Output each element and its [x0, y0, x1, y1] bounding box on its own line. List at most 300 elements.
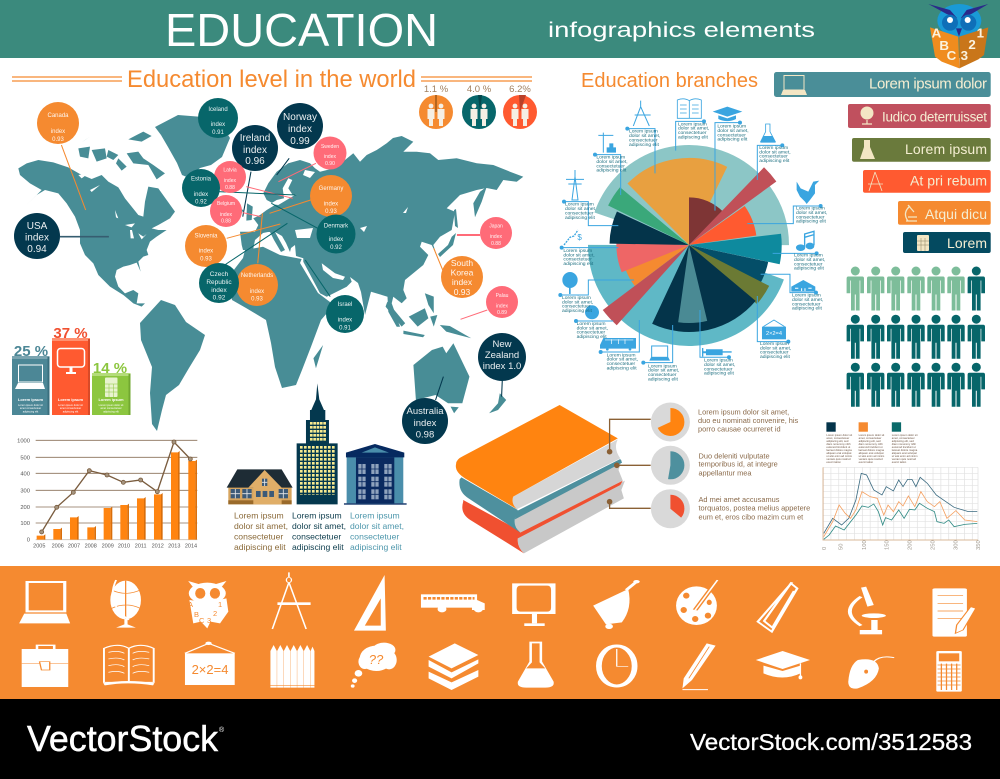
callout: rooster: Lorem ipsum [796, 206, 825, 212]
legend: teal series: exerci tation [892, 460, 907, 464]
bubble: Norway: Norway [283, 112, 317, 123]
Eurasia [240, 136, 523, 327]
line chart axis labels [822, 540, 982, 550]
islands [238, 203, 506, 413]
icon: stack of books [456, 405, 625, 553]
subtitle: infographics elements [548, 18, 815, 42]
icon: blackboard: 2×2=4 [192, 662, 228, 677]
legend: orange series: amet, consectetuer [859, 436, 882, 440]
callout: ball: dolor sit amet, [577, 325, 608, 331]
Greenland [155, 115, 230, 178]
gender percentage circles [419, 84, 537, 129]
callout: laptop: Lorem ipsum [648, 363, 677, 369]
bubble: Japan: Japan [489, 224, 503, 230]
callout 2 connector and pie [614, 446, 778, 485]
callout: ball: adipiscing elit [577, 334, 607, 340]
bubble: Japan: 0.88 [491, 241, 501, 247]
bubble: Estonia: 0.92 [195, 200, 207, 206]
people row: all dark [847, 315, 985, 359]
column 37 % monitor [52, 325, 90, 415]
chart y axis labels: 400 [20, 471, 30, 477]
callout: finance chart: consectetuer [563, 257, 592, 263]
callout 1 text: duo eu nominati convenire, his [698, 416, 799, 425]
bar: Lorem ipsum: Lorem ipsum [905, 141, 987, 157]
callout: building: Lorem ipsum [792, 293, 821, 299]
caption: skyscraper: adipiscing elit [292, 542, 344, 552]
callout: ball [574, 305, 613, 340]
bar: Lorem ipsum dolor [774, 72, 991, 97]
bubble: Latvia: index [224, 178, 236, 184]
legend: teal series: adipiscing elit, sed [892, 439, 914, 443]
column 14 % calculator: amet consectetuer [100, 406, 122, 410]
column 37 % monitor: 37 % [53, 325, 88, 342]
bubble: Israel: index [338, 318, 352, 324]
country index bubbles [14, 98, 526, 444]
caption: bank: dolor sit amet, [350, 521, 404, 531]
icon: set square [354, 575, 386, 631]
callout: graduation cap: Lorem ipsum [717, 124, 746, 130]
callout: rooster: dolor sit amet, [796, 210, 827, 216]
callout: book: Lorem ipsum [678, 121, 707, 127]
legend: orange series: exerci tation [859, 460, 874, 464]
caption: house [234, 510, 288, 552]
icon: bank building [344, 444, 407, 505]
bubble: Iceland: 0.91 [212, 130, 224, 136]
callout 2 text [698, 451, 778, 477]
callout: rooster: adipiscing elit [796, 219, 827, 225]
icon: school bus [421, 594, 485, 612]
caption: bank: Lorem ipsum [350, 510, 400, 520]
bubble: Australia: 0.98 [416, 430, 434, 440]
icon: skyscraper [297, 383, 338, 504]
bubble: Ireland: index [243, 145, 267, 156]
bubble: Sweden: index [324, 154, 336, 160]
bubble: Israel: Israel [338, 302, 352, 308]
chart x axis labels: 2005 [33, 544, 45, 550]
callout 2 text: Duo deleniti vulputate [698, 451, 770, 460]
icon: bell [593, 580, 640, 629]
legend: dark series: exerci tation [826, 460, 841, 464]
chart y axis labels: 1000 [17, 438, 30, 444]
bubble: Belgium: Belgium [217, 201, 235, 207]
column 14 % calculator: Lorem ipsum dolor sit [99, 403, 124, 407]
legend: dark series [826, 422, 853, 464]
legend: teal series: laoreet dolore magna [892, 448, 918, 452]
bubble: Germany: 0.93 [325, 209, 337, 215]
callout: flask [757, 124, 791, 180]
heading: education level in the world: Education level in the world [127, 66, 416, 93]
caption: house: adipiscing elit [234, 542, 286, 552]
icon: clock [599, 646, 635, 686]
icon: open book [104, 645, 154, 684]
legend: dark series: euismod tincidunt ut [826, 445, 851, 449]
icon: owl with book: C [199, 616, 205, 625]
chart x axis labels: 2012 [152, 544, 164, 550]
callout: music: Lorem ipsum [794, 253, 823, 259]
callout: crane: dolor sit amet, [596, 159, 628, 165]
icon: flask [518, 642, 554, 688]
bubble: Czech Republic: 0.92 [213, 294, 226, 302]
people row: all dark [847, 363, 985, 407]
bubble: Ireland: Ireland [240, 133, 270, 144]
North America and Arctic [18, 132, 175, 307]
bubble: Belgium [210, 195, 242, 227]
icon: laptop [19, 581, 70, 623]
bubble: Latvia: Latvia [223, 168, 237, 174]
callout: music: consectetuer [794, 261, 823, 267]
bubble connector lines [60, 145, 502, 400]
callout: tree: adipiscing elit [562, 308, 593, 314]
bubble: Estonia: Estonia [191, 176, 212, 182]
callout: finance chart: $ [577, 233, 582, 242]
icon: calculator [936, 651, 962, 692]
chart y axis labels: 100 [20, 521, 30, 527]
callout: flask: consectetuer [759, 154, 788, 160]
column 14 % calculator: 14 % [93, 360, 127, 377]
percent circle 6.2 %: 6.2% [509, 84, 531, 95]
callout: blackboard: consectetuer [760, 350, 789, 356]
title: EDUCATION [165, 4, 438, 56]
column 25 % laptop: 25 % [14, 343, 48, 360]
bubble: New Zealand: Zealand [485, 350, 519, 361]
bubble: Latvia [214, 161, 246, 193]
bubble: Norway: 0.99 [290, 136, 310, 147]
small line chart with legend [822, 422, 982, 550]
callout: compass: adipiscing elit [629, 142, 660, 148]
bubble: USA: 0.94 [27, 244, 47, 255]
caption: bank: adipiscing elit [350, 542, 402, 552]
legend: teal series: diam nonummy nibh [892, 442, 917, 446]
bubble: Denmark: Denmark [324, 224, 349, 230]
legend: teal series: veniam quis nostrud [892, 457, 916, 461]
bubble: Australia: Australia [407, 406, 444, 417]
callout: tree: Lorem ipsum [562, 295, 591, 301]
bubble: USA: USA [27, 221, 48, 232]
Africa [229, 247, 334, 388]
bubble: Belgium: 0.88 [221, 218, 231, 224]
callout: flask: dolor sit amet, [759, 149, 791, 155]
icon: owl with book: 1 [218, 600, 222, 609]
menu label bars [774, 72, 991, 253]
callout: laptop: dolor sit amet, [648, 368, 679, 374]
callout 2 text: appellantur mea [698, 468, 752, 477]
bubble: Belgium: index [220, 212, 232, 218]
callout: bus: Lorem ipsum [607, 352, 635, 358]
bar and line chart [17, 438, 197, 550]
bubble: Germany: index [324, 202, 338, 208]
building captions [234, 510, 404, 552]
bubble: Germany [310, 175, 352, 217]
legend: orange series: ut wisi enim ad minim [859, 454, 885, 458]
bar: Iudico deterruisset [848, 104, 991, 128]
callout: power tower: Lorem ipsum [565, 202, 594, 208]
legend: orange series: laoreet dolore magna [859, 448, 885, 452]
bar: Iudico deterruisset: Iudico deterruisset [882, 110, 987, 124]
column 37 % monitor: amet consectetuer [60, 406, 81, 410]
icon: owl logo with book: 2 [968, 37, 976, 52]
caption: bank [350, 510, 404, 552]
bubble: Palau [486, 286, 518, 318]
pie chart callouts [558, 99, 827, 382]
bar: Lorem [903, 232, 991, 253]
bubble: Palau: index [496, 304, 508, 310]
bubble: Netherlands: index [250, 289, 264, 295]
callout: book [676, 99, 709, 151]
icon: microscope [850, 587, 886, 634]
bar: Atqui dicu [898, 201, 991, 225]
percent circle 1.1 %: 1.1 % [424, 84, 449, 95]
callout: music: adipiscing elit [794, 266, 825, 272]
bubble: Japan [480, 217, 512, 249]
callout: bus: adipiscing elit [607, 365, 637, 371]
column 14 % calculator: Lorem ipsum [98, 397, 124, 402]
icon strip panel [0, 566, 1000, 699]
callout: syringe: dolor sit amet, [704, 362, 735, 368]
callout: crane: Lorem ipsum [596, 155, 625, 161]
bubble: Denmark: index [329, 237, 343, 243]
icon: owl logo with book: 1 [977, 25, 985, 40]
callout: compass: Lorem ipsum [629, 129, 658, 135]
Italy [270, 232, 285, 252]
callout: power tower [562, 170, 618, 226]
callout: bus: consectetuer [607, 361, 636, 367]
chart y axis labels [17, 438, 30, 544]
caption: bank: consectetuer [350, 532, 399, 542]
caption: skyscraper: dolor sit amet, [292, 521, 346, 531]
callout: finance chart: adipiscing elit [563, 261, 594, 267]
callout: blackboard [757, 296, 791, 360]
icon: owl logo with book: 3 [961, 48, 968, 63]
caption: house: Lorem ipsum [234, 510, 284, 520]
icon: owl with book [188, 581, 228, 628]
legend: dark series: laoreet dolore magna [826, 448, 852, 452]
callout: building: adipiscing elit [792, 306, 823, 312]
callout 3 connector and pie [607, 489, 810, 528]
bubble: Estonia [182, 169, 220, 207]
people pictogram [847, 266, 985, 407]
callout: finance chart [560, 230, 618, 267]
callout 1 text: Lorem ipsum dolor sit amet, [698, 408, 789, 417]
caption: skyscraper: consectetuer [292, 532, 341, 542]
bubble: Czech Republic: index [211, 287, 228, 294]
column 14 % calculator [92, 360, 130, 415]
legend: dark series: aliquam erat volutpat [826, 451, 852, 455]
percent circle 4.0 %: 4.0 % [467, 84, 492, 95]
icon: owl logo with book: B [939, 38, 949, 53]
callout: syringe: adipiscing elit [704, 371, 735, 377]
callout: building [761, 274, 823, 312]
callout: book: adipiscing elit [678, 134, 709, 140]
legend: orange series: euismod tincidunt ut [859, 445, 883, 449]
callout 3 text: eum et, eros cibo mazim cum et [698, 512, 803, 521]
callout: blackboard: adipiscing elit [760, 354, 791, 360]
chart x axis labels [33, 544, 197, 550]
legend: dark series: ut wisi enim ad minim [826, 454, 853, 458]
icon: monitor [512, 583, 556, 626]
bubble: Iceland [198, 98, 238, 138]
bubble: Ireland [232, 125, 278, 171]
header band [0, 0, 1000, 68]
legend: orange series: veniam quis nostrud [859, 457, 883, 461]
bubble: Latvia: 0.88 [225, 185, 235, 191]
line chart axis labels: 200 [908, 540, 914, 550]
callout: bus: dolor sit amet, [607, 357, 638, 363]
bubble: South Korea: index [452, 277, 473, 287]
percentage device columns [12, 325, 130, 415]
callout 1 text [698, 408, 799, 433]
legend: teal series: amet, consectetuer [892, 436, 915, 440]
caption: skyscraper [292, 510, 346, 552]
icon: pencil [682, 643, 716, 690]
chart x axis labels: 2009 [102, 544, 114, 550]
callout: tree: dolor sit amet, [562, 299, 593, 305]
legend: dark series: Lorem ipsum dolor sit [826, 433, 852, 437]
people row: six light and one dark [847, 266, 985, 310]
callout: syringe: consectetuer [704, 366, 733, 372]
bubble: Netherlands: Netherlands [241, 273, 273, 279]
callout: crane [593, 133, 628, 195]
icon: owl with book: A [188, 600, 193, 609]
chart x axis labels: 2014 [185, 544, 197, 550]
callout: building: consectetuer [792, 301, 821, 307]
legend: orange series [859, 422, 885, 464]
book callouts [607, 402, 810, 528]
callout: book: consectetuer [678, 130, 707, 136]
column 25 % laptop: Lorem ipsum dolor sit [18, 403, 43, 407]
icon: owl with book: B [194, 610, 199, 619]
chart y axis labels: 200 [20, 505, 30, 511]
callout: ball: Lorem ipsum [577, 321, 605, 327]
bubble: Norway: index [288, 124, 312, 135]
bubble: South Korea: 0.93 [454, 287, 471, 297]
chart y axis labels: 0 [27, 538, 30, 544]
callout: tree: consectetuer [562, 304, 591, 310]
legend: teal series: euismod tincidunt ut [892, 445, 916, 449]
icon: pencils [268, 645, 316, 688]
callout: power tower: adipiscing elit [565, 215, 596, 221]
legend: dark series: amet, consectetuer [826, 436, 849, 440]
icon: paper clip [758, 582, 797, 632]
legend: dark series: veniam quis nostrud [826, 457, 851, 461]
bubble: South Korea [441, 256, 483, 298]
column 14 % calculator: adipiscing elit [103, 410, 119, 414]
bar: At pri rebum [863, 170, 991, 193]
bubble: New Zealand: New [492, 339, 512, 350]
radial pie chart [613, 169, 765, 321]
icon: thought cloud: ?? [369, 652, 384, 667]
bubble: Denmark: 0.92 [330, 245, 342, 251]
column 37 % monitor: Lorem ipsum dolor sit [58, 403, 83, 407]
caption: house: consectetuer [234, 532, 283, 542]
bubble: USA [14, 213, 60, 259]
icon: thought cloud [351, 643, 397, 688]
callout: laptop [641, 325, 679, 382]
bubble: Germany: Germany [319, 186, 343, 192]
chart x axis labels: 2006 [52, 544, 64, 550]
buildings [227, 383, 407, 505]
callout: music: dolor sit amet, [794, 257, 825, 263]
callout: ball: consectetuer [577, 330, 606, 336]
bubble: South Korea: South [451, 258, 473, 268]
callout 3 text: Ad mei amet accusamus [698, 495, 780, 504]
callout: flask: adipiscing elit [759, 158, 790, 164]
callout: laptop: adipiscing elit [648, 376, 679, 382]
caption: house: dolor sit amet, [234, 521, 288, 531]
callout: building: dolor sit amet, [792, 297, 823, 303]
world map [18, 115, 523, 431]
callout: music [773, 231, 825, 272]
bubble: Czech Republic [199, 263, 239, 303]
callout: compass: consectetuer [629, 137, 658, 143]
callout 3 text [698, 495, 810, 521]
bubble: Australia [402, 398, 448, 444]
callout: rooster [747, 181, 827, 225]
callout: syringe [700, 310, 735, 377]
bubble: Japan: index [490, 234, 502, 240]
chart x axis labels: 2013 [168, 544, 180, 550]
icon: owl logo with book [928, 4, 988, 68]
bubble: Slovenia: 0.93 [200, 256, 212, 262]
icon: graduation cap [756, 651, 810, 679]
caption: skyscraper: Lorem ipsum [292, 510, 342, 520]
column 37 % monitor: Lorem ipsum [58, 397, 83, 402]
icon: compass [272, 572, 311, 629]
legend: orange series: adipiscing elit, sed [859, 439, 881, 443]
callout: blackboard: 2×2=4 [766, 331, 782, 337]
callout 1 connector and pie [607, 402, 799, 455]
legend: orange series: aliquam erat volutpat [859, 451, 884, 455]
chart x axis labels: 2008 [85, 544, 97, 550]
line chart axis labels: 250 [930, 540, 936, 550]
column 37 % monitor: adipiscing elit [63, 410, 79, 414]
column 25 % laptop: amet consectetuer [20, 406, 41, 410]
bubble: Slovenia: Slovenia [194, 234, 218, 240]
bar: Lorem ipsum [852, 138, 991, 162]
bubble: Netherlands [236, 264, 278, 306]
icon: owl logo with book: A [932, 25, 942, 40]
legend: dark series: diam nonummy nibh [826, 442, 851, 446]
callout: flask: Lorem ipsum [759, 145, 788, 151]
bubble: New Zealand: index 1.0 [483, 361, 521, 372]
callout: power tower: dolor sit amet, [565, 206, 596, 212]
bubble: Czech Republic: Czech [210, 271, 229, 278]
legend: orange series: diam nonummy nibh [859, 442, 883, 446]
callout: compass [625, 101, 660, 173]
callout: crane: consectetuer [596, 163, 625, 169]
bar: Lorem: Lorem [947, 235, 987, 251]
chart x axis labels: 2007 [68, 544, 80, 550]
callout: finance chart: dolor sit amet, [563, 252, 595, 258]
legend: dark series: adipiscing elit, sed [826, 439, 849, 443]
bubble: Australia: index [414, 418, 437, 429]
icon: briefcase [22, 645, 68, 687]
heading: education level in the world [12, 66, 532, 93]
bar: Atqui dicu: Atqui dicu [925, 206, 987, 222]
callout: bus [599, 320, 639, 371]
callout: graduation cap: dolor sit amet, [717, 128, 749, 134]
bar: At pri rebum: At pri rebum [910, 172, 987, 188]
bubble: Canada: Canada [47, 113, 69, 119]
bar: Lorem ipsum dolor: Lorem ipsum dolor [869, 76, 987, 92]
icon: house [227, 469, 293, 504]
callout: rooster: consectetuer [796, 214, 825, 220]
line chart axis labels: 100 [862, 540, 868, 550]
bubble: Netherlands: 0.93 [251, 296, 263, 302]
column 25 % laptop: Lorem ipsum [18, 397, 43, 402]
Japan and Kamchatka [438, 187, 487, 257]
legend: teal series: ut wisi enim ad minim [892, 454, 918, 458]
icon: owl logo with book: C [947, 48, 957, 63]
